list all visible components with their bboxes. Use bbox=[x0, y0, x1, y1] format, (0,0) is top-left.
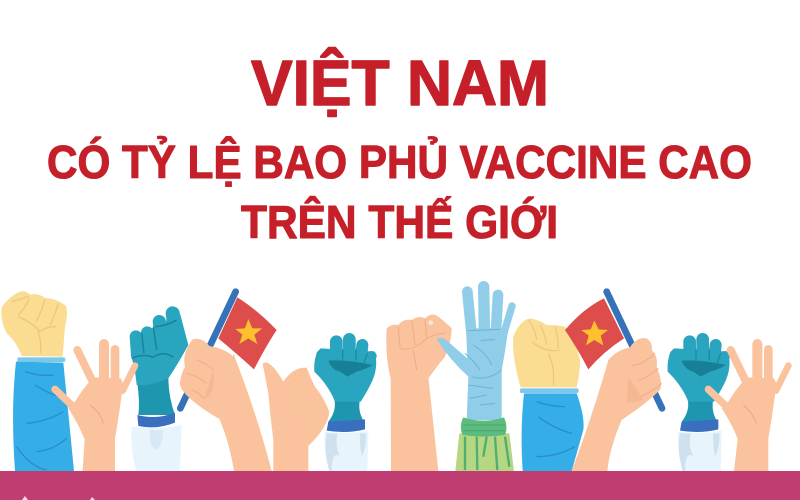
illustration: raised hands left bbox=[1, 291, 277, 471]
illustration: raised hands centre bbox=[263, 287, 514, 471]
icon: blue sleeve bbox=[13, 357, 74, 471]
icon: teal glove fist bbox=[314, 339, 376, 471]
icon: teal glove fist bbox=[131, 313, 188, 471]
icon: yellow star bbox=[235, 319, 262, 344]
icon: blue sleeve bbox=[520, 388, 584, 471]
icon: yellow fist bbox=[1, 291, 67, 357]
icon: arm holding flag bbox=[180, 339, 272, 471]
title bbox=[47, 46, 752, 248]
heading: Việt Nam: VIỆT NAM bbox=[251, 46, 549, 119]
icon: light blue glove hand bbox=[437, 287, 512, 420]
heading: coverage line: CÓ TỶ LỆ BAO PHỦ VACCINE CAO bbox=[47, 136, 752, 188]
icon: green cuff and sleeve bbox=[455, 417, 514, 471]
icon: open hand bbox=[708, 344, 788, 471]
icon: flag pole and flag bbox=[180, 292, 277, 408]
icon: raised fist bbox=[386, 315, 452, 471]
icon: teal glove fist bbox=[668, 339, 730, 471]
heading: world line: TRÊN THẾ GIỚI bbox=[241, 196, 558, 248]
illustration: raised hands right bbox=[513, 292, 788, 471]
icon: open hand bbox=[55, 344, 135, 471]
footer text tops bbox=[22, 496, 95, 500]
icon: thumbs-up hand bbox=[263, 362, 329, 471]
footer band bbox=[0, 471, 800, 500]
icon: flag pole and flag bbox=[565, 292, 662, 408]
icon: arm holding flag bbox=[572, 338, 662, 471]
icon: yellow fist bbox=[513, 318, 580, 387]
icon: yellow star bbox=[581, 321, 608, 345]
